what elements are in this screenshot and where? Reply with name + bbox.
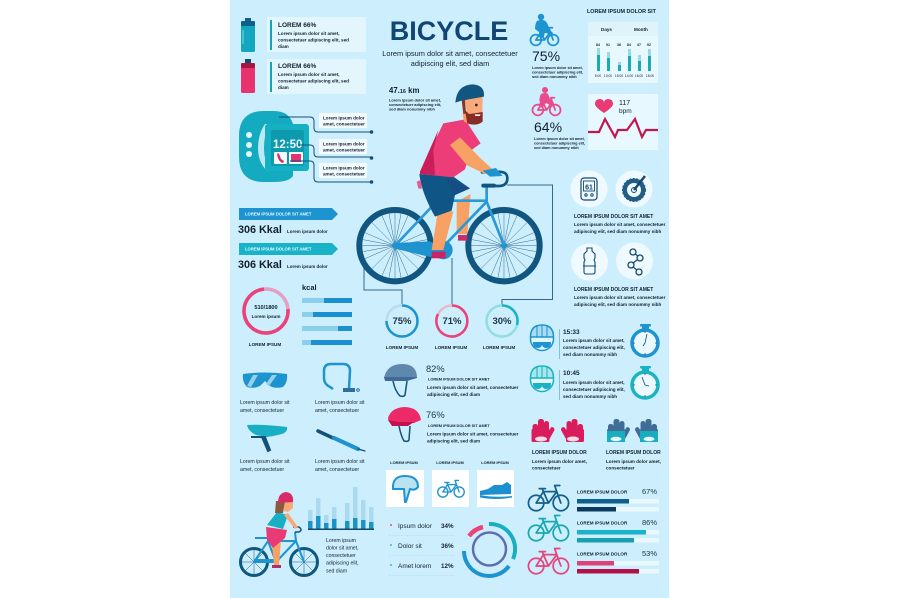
callout 2 — [319, 139, 367, 154]
banner 2 — [239, 243, 338, 255]
donut 510/1800: LOREM IPSUM — [249, 342, 281, 347]
ring 30%: 30% — [492, 316, 512, 327]
legs — [272, 540, 281, 565]
banner 1: LOREM IPSUM DOLOR SIT AMET — [245, 212, 312, 216]
head — [465, 97, 483, 123]
connector lines — [364, 185, 552, 305]
icon: pink bottle — [241, 59, 255, 93]
legend list: Amet lorem — [398, 563, 431, 570]
card: bike: LOREM IPSUM — [436, 460, 464, 465]
near leg — [432, 208, 453, 250]
icon: rider head teal — [530, 366, 554, 392]
callout 1 — [319, 113, 367, 128]
bar chart: Month — [634, 27, 648, 32]
ring 71%: LOREM IPSUM — [435, 345, 467, 350]
legend list: Dolor sit — [398, 543, 422, 550]
stat 76% — [426, 410, 519, 444]
label: Lorem ipsum dolor sit — [315, 400, 365, 406]
icon: bike pump — [318, 431, 365, 451]
bike row 3: 53% — [642, 549, 657, 558]
stat 64%: 64% — [534, 119, 562, 135]
text card: Lorem ipsum dolor sit amet, — [278, 72, 340, 77]
stat 64%: sed diam nonummy nibh — [534, 146, 579, 150]
icon: sunglasses — [243, 372, 287, 388]
shoe — [272, 565, 281, 568]
text card: LOREM 66% — [278, 63, 317, 70]
distance stat: 47.16 km — [389, 86, 419, 95]
time 10:45: sed diam nonummy nibh — [563, 394, 617, 399]
donut 510/1800 — [242, 287, 290, 347]
icon: gear circle — [616, 170, 652, 208]
icon: rider head blue — [530, 325, 554, 350]
legend list: Ipsum dolor — [398, 523, 433, 530]
text block: LOREM IPSUM DOLOR — [606, 450, 661, 456]
text block: consectetuer — [532, 466, 561, 470]
label: amet, consectetuer — [315, 408, 359, 414]
bike row 2: LOREM IPSUM DOLOR — [577, 520, 628, 526]
icon: teal bottle — [241, 18, 255, 52]
time 10:45: consectetuer adipiscing elit, — [563, 387, 625, 392]
label — [240, 459, 290, 473]
icon: chain circle — [616, 242, 653, 280]
smartwatch: 12:50 — [273, 139, 302, 151]
heart rate panel: bpm — [619, 108, 632, 115]
distance stat — [389, 86, 441, 112]
bar chart: 14:00 — [625, 74, 633, 78]
label: Lorem ipsum dolor sit — [240, 459, 290, 465]
text card — [267, 17, 366, 52]
icon: gauge circle: 61 — [585, 184, 593, 192]
stat 75%: Lorem ipsum dolor sit amet, — [532, 66, 583, 70]
frame — [254, 527, 304, 562]
stat 82% — [426, 364, 519, 397]
bar chart: 16:00 — [635, 74, 643, 78]
legend list — [389, 523, 455, 576]
saddle pack — [417, 180, 422, 189]
donut 510/1800: Lorem ipsum — [252, 314, 280, 319]
heart rate panel: 117 — [619, 100, 630, 107]
helmet — [455, 84, 484, 103]
caption: dolor sit amet, — [326, 546, 359, 552]
icon: bottle circle — [571, 244, 608, 280]
panel: bottle pink — [241, 59, 366, 94]
label — [240, 400, 290, 414]
bike row 2 — [528, 515, 659, 542]
hair — [275, 501, 285, 513]
text block: LOREM IPSUM DOLOR SIT AMET — [574, 287, 653, 293]
text block — [574, 214, 666, 234]
ring 75% — [386, 306, 418, 350]
icon: stopwatch teal — [632, 366, 658, 398]
caption: adipiscing elit, — [326, 560, 359, 566]
icon: stopwatch blue — [632, 324, 658, 356]
stat 76%: Lorem ipsum dolor sit amet, consectetuer — [427, 432, 519, 436]
stat kcal 2: 306 Kkal — [238, 259, 282, 271]
icon: pink helmet — [388, 407, 421, 441]
bar chart — [588, 22, 658, 83]
rider icon pink — [532, 87, 561, 115]
text card: consectetuer adipiscing elit, sed — [278, 38, 349, 42]
main cyclist illustration — [359, 84, 540, 281]
far leg — [457, 194, 471, 234]
arm — [284, 513, 298, 529]
bar chart: 84 — [596, 43, 600, 47]
label: amet, consectetuer — [240, 467, 284, 473]
ring 75%: LOREM IPSUM — [386, 345, 418, 350]
text card: diam — [278, 44, 289, 49]
stat 82%: Lorem ipsum dolor sit amet, consectetuer — [427, 385, 519, 390]
callout 3: amet, consectetuer — [323, 172, 365, 176]
stat 76%: LOREM IPSUM DOLOR SIT AMET — [428, 423, 490, 428]
bicycle frame — [395, 187, 504, 259]
torso — [420, 119, 481, 177]
helmet — [278, 492, 293, 503]
title: BICYCLE — [390, 16, 508, 46]
rider icon blue — [530, 14, 559, 45]
callout 3: Lorem ipsum dolor — [323, 166, 365, 170]
bar chart: 91 — [606, 43, 610, 47]
time 15:33: consectetuer adipiscing elit, — [563, 345, 625, 350]
stat 75%: sed diam nonummy nibh — [532, 75, 577, 79]
label: Lorem ipsum dolor sit — [240, 400, 290, 406]
subtitle — [382, 49, 518, 68]
bike row 1 — [528, 485, 659, 512]
bike row 2: 86% — [642, 518, 657, 527]
card: helmet: LOREM IPSUM — [390, 460, 418, 465]
caption — [326, 538, 359, 574]
bike row 1: LOREM IPSUM DOLOR — [577, 490, 628, 494]
text card: LOREM 66% — [278, 22, 317, 29]
icon: saddle — [247, 425, 287, 451]
front wheel — [468, 210, 540, 281]
time 10:45 — [559, 370, 625, 400]
neck — [463, 113, 468, 123]
stat kcal 2 — [238, 259, 328, 271]
bar chart: 84 — [627, 43, 631, 47]
text block: adipiscing elit, sed diam nonummy nibh — [574, 229, 661, 234]
ring 30%: LOREM IPSUM — [483, 345, 515, 350]
ring 75%: 75% — [392, 316, 412, 327]
subtitle: Lorem ipsum dolor sit amet, consectetuer — [382, 49, 518, 58]
multi ring chart — [464, 524, 515, 576]
card: helmet — [386, 460, 424, 507]
rear wheel — [359, 210, 431, 281]
stat 75%: 75% — [532, 48, 560, 64]
label: Lorem ipsum dolor sit — [315, 459, 365, 465]
text card: Lorem ipsum dolor sit amet, — [278, 31, 340, 36]
shorts — [266, 527, 287, 548]
stat 76%: adipiscing elit, sed diam — [427, 438, 480, 444]
text block: Lorem ipsum dolor sit amet, consectetuer — [574, 222, 666, 227]
callout lines — [279, 117, 373, 183]
time 15:33: Lorem ipsum dolor sit amet, — [563, 338, 625, 343]
bar chart: 13:00 — [604, 74, 612, 78]
card: shoe: LOREM IPSUM — [481, 460, 509, 465]
time 10:45: 10:45 — [563, 370, 580, 377]
time 15:33: 15:33 — [563, 329, 580, 336]
donut 510/1800: 510/1800 — [254, 305, 278, 311]
callout 1: amet, consectetuer — [323, 122, 365, 126]
icon: blue gloves — [607, 419, 658, 442]
stat 64%: consectetuer adipiscing elit, — [534, 142, 585, 146]
label — [315, 400, 365, 414]
bar chart: 15:00 — [615, 74, 623, 78]
stat kcal 1: 306 Kkal — [238, 224, 282, 236]
time 10:45: Lorem ipsum dolor sit amet, — [563, 380, 625, 385]
bar chart: 18:00 — [646, 74, 654, 78]
icon: bike lock — [324, 364, 359, 391]
bike row 3: LOREM IPSUM DOLOR — [577, 552, 628, 556]
icon: pink gloves — [532, 419, 584, 442]
legend list: 12% — [441, 563, 454, 570]
background panel — [230, 0, 669, 598]
smartwatch — [239, 111, 309, 182]
bar chart: 36 — [617, 43, 621, 47]
legend list: 36% — [441, 543, 454, 550]
chart heading: LOREM IPSUM DOLOR SIT — [587, 9, 657, 15]
ring 71% — [435, 306, 468, 350]
wheels — [240, 548, 318, 576]
text block: consectetuer — [606, 466, 635, 470]
panel: bottle blue — [241, 17, 366, 52]
ring 71%: 71% — [442, 316, 462, 327]
text card: consectetuer adipiscing elit, sed — [278, 78, 349, 84]
callout 2: amet, consectetuer — [323, 148, 365, 152]
glove — [483, 168, 503, 177]
caption: sed diam — [326, 568, 347, 574]
torso — [267, 512, 288, 529]
time 15:33: sed diam nonummy nibh — [563, 352, 617, 357]
heart rate panel — [588, 94, 658, 150]
text card — [267, 59, 366, 94]
stat 75%: consectetuer adipiscing elit, — [532, 70, 583, 74]
distance stat: consectetuer adipiscing elit, — [389, 102, 441, 107]
stat 82%: adipiscing elit, sed diam — [427, 392, 480, 397]
stat 64%: Lorem ipsum dolor sit amet, — [534, 137, 585, 141]
stat 76%: 76% — [426, 410, 445, 420]
small cyclist — [240, 492, 318, 576]
stat kcal 1: Lorem ipsum dolor — [287, 229, 328, 234]
arm — [450, 137, 493, 174]
distance stat: sed diam nonummy nibh — [389, 106, 435, 112]
text block: Lorem ipsum dolor amet, — [532, 459, 587, 464]
legend list: 34% — [441, 523, 454, 530]
icon: grey-blue helmet — [384, 364, 417, 396]
caption: consectetuer — [326, 553, 356, 559]
stat 82%: LOREM IPSUM DOLOR SIT AMET — [428, 376, 490, 382]
stat 75% — [532, 48, 583, 79]
text block: LOREM IPSUM DOLOR — [532, 450, 587, 456]
distance stat: Lorem ipsum dolor sit amet, — [389, 98, 441, 102]
text block: Lorem ipsum dolor amet, — [606, 459, 661, 464]
callout 1: Lorem ipsum dolor — [323, 116, 365, 120]
label — [315, 459, 365, 473]
label: amet, consectetuer — [240, 408, 284, 414]
text card: diam — [278, 85, 289, 90]
subtitle: adipiscing elit, sed diam — [411, 59, 489, 68]
head — [284, 500, 293, 512]
stat kcal 2: Lorem ipsum dolor — [287, 264, 328, 269]
kcal bars: kcal — [302, 283, 317, 292]
shorts — [419, 174, 470, 217]
bike row 3 — [528, 548, 659, 574]
card: shoe — [477, 460, 514, 507]
bike row 1: 67% — [642, 487, 657, 496]
bar chart: 92 — [647, 43, 651, 47]
icon: gauge circle — [570, 170, 608, 208]
time 15:33 — [559, 329, 625, 359]
label: amet, consectetuer — [315, 467, 359, 473]
bar chart: Days — [601, 27, 612, 32]
caption: Lorem ipsum — [326, 538, 356, 544]
card: bike — [432, 460, 469, 507]
text block — [532, 450, 587, 470]
text block — [606, 450, 661, 470]
bar chart: 5:00 — [595, 74, 601, 78]
callout 2: Lorem ipsum dolor — [323, 142, 365, 146]
banner 2: LOREM IPSUM DOLOR SIT AMET — [245, 246, 312, 252]
text block: adipiscing elit, sed diam nonummy nibh — [574, 302, 661, 307]
callout 3 — [319, 163, 367, 178]
small bar chart — [308, 487, 374, 530]
kcal bars — [302, 283, 352, 345]
bar chart: 37 — [637, 43, 641, 47]
stat 82%: 82% — [426, 364, 445, 374]
ring 30% — [483, 305, 518, 350]
handlebar — [482, 172, 507, 186]
text block: LOREM IPSUM DOLOR SIT AMET — [574, 214, 653, 220]
stat 64% — [534, 119, 585, 150]
banner 1 — [239, 208, 338, 220]
stat kcal 1 — [238, 224, 328, 236]
text block: Lorem ipsum dolor sit amet, consectetuer — [574, 295, 666, 300]
text block — [574, 287, 666, 307]
